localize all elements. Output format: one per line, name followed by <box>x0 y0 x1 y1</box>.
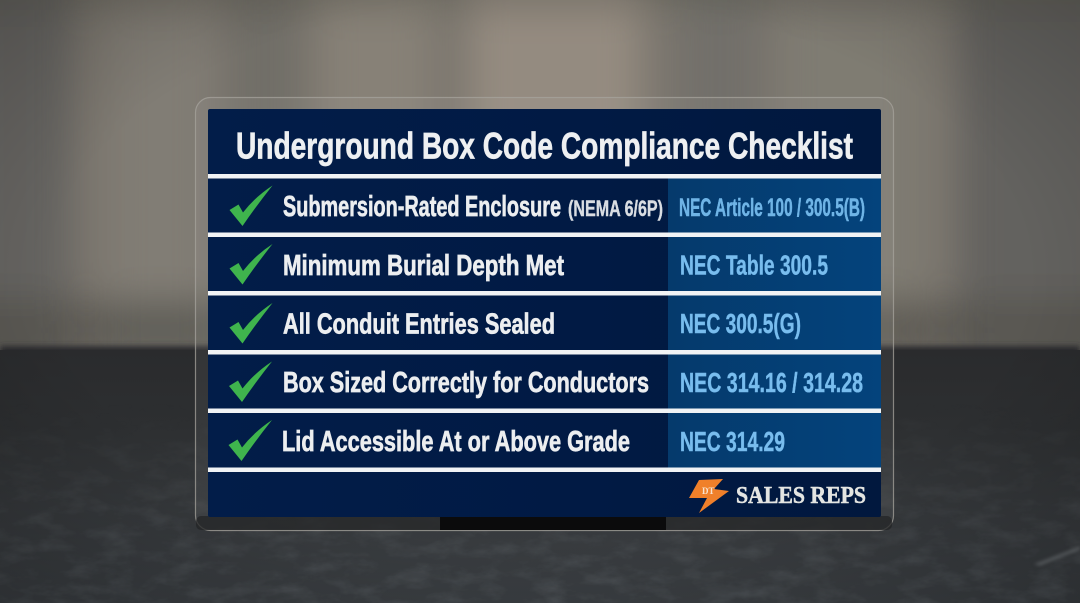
logo: DT Sales Reps <box>689 479 866 513</box>
item 5 label: Lid Accessible At or Above Grade <box>282 426 630 458</box>
title: Underground Box Code Compliance Checklist <box>236 126 853 166</box>
logo wordmark: SALES REPS <box>736 483 866 509</box>
row 5 <box>228 420 785 461</box>
background: dark stone table <box>0 346 1080 603</box>
item 1 code: NEC Article 100 / 300.5(B) <box>679 194 865 222</box>
right column blue panel <box>668 178 881 469</box>
icon: check 3 <box>230 303 272 344</box>
clear plastic card holder <box>196 98 894 530</box>
checklist card <box>208 109 881 517</box>
holder lower shadow <box>196 516 892 530</box>
item 4 label: Box Sized Correctly for Conductors <box>283 367 649 399</box>
card base <box>208 109 881 517</box>
icon: orange lightning bolt <box>689 479 729 513</box>
item 1 note: (NEMA 6/6P) <box>568 196 663 221</box>
row 4 <box>229 362 863 402</box>
row 2 <box>230 244 828 284</box>
logo monogram: DT <box>702 486 715 496</box>
item 5 code: NEC 314.29 <box>680 426 785 457</box>
item 4 code: NEC 314.16 / 314.28 <box>680 367 863 398</box>
icon: check 5 <box>228 420 272 461</box>
background: blurred wall <box>0 0 1080 380</box>
row 3 <box>230 303 801 344</box>
item 3 code: NEC 300.5(G) <box>680 308 801 339</box>
item 1 label: Submersion-Rated Enclosure <box>283 191 561 223</box>
icon: check 1 <box>230 186 272 226</box>
row 1 <box>230 186 865 226</box>
item 3 label: All Conduit Entries Sealed <box>283 308 555 340</box>
icon: check 2 <box>230 244 272 284</box>
icon: check 4 <box>229 362 272 402</box>
item 2 label: Minimum Burial Depth Met <box>283 250 564 282</box>
row dividers <box>208 174 881 472</box>
item 2 code: NEC Table 300.5 <box>680 250 828 280</box>
